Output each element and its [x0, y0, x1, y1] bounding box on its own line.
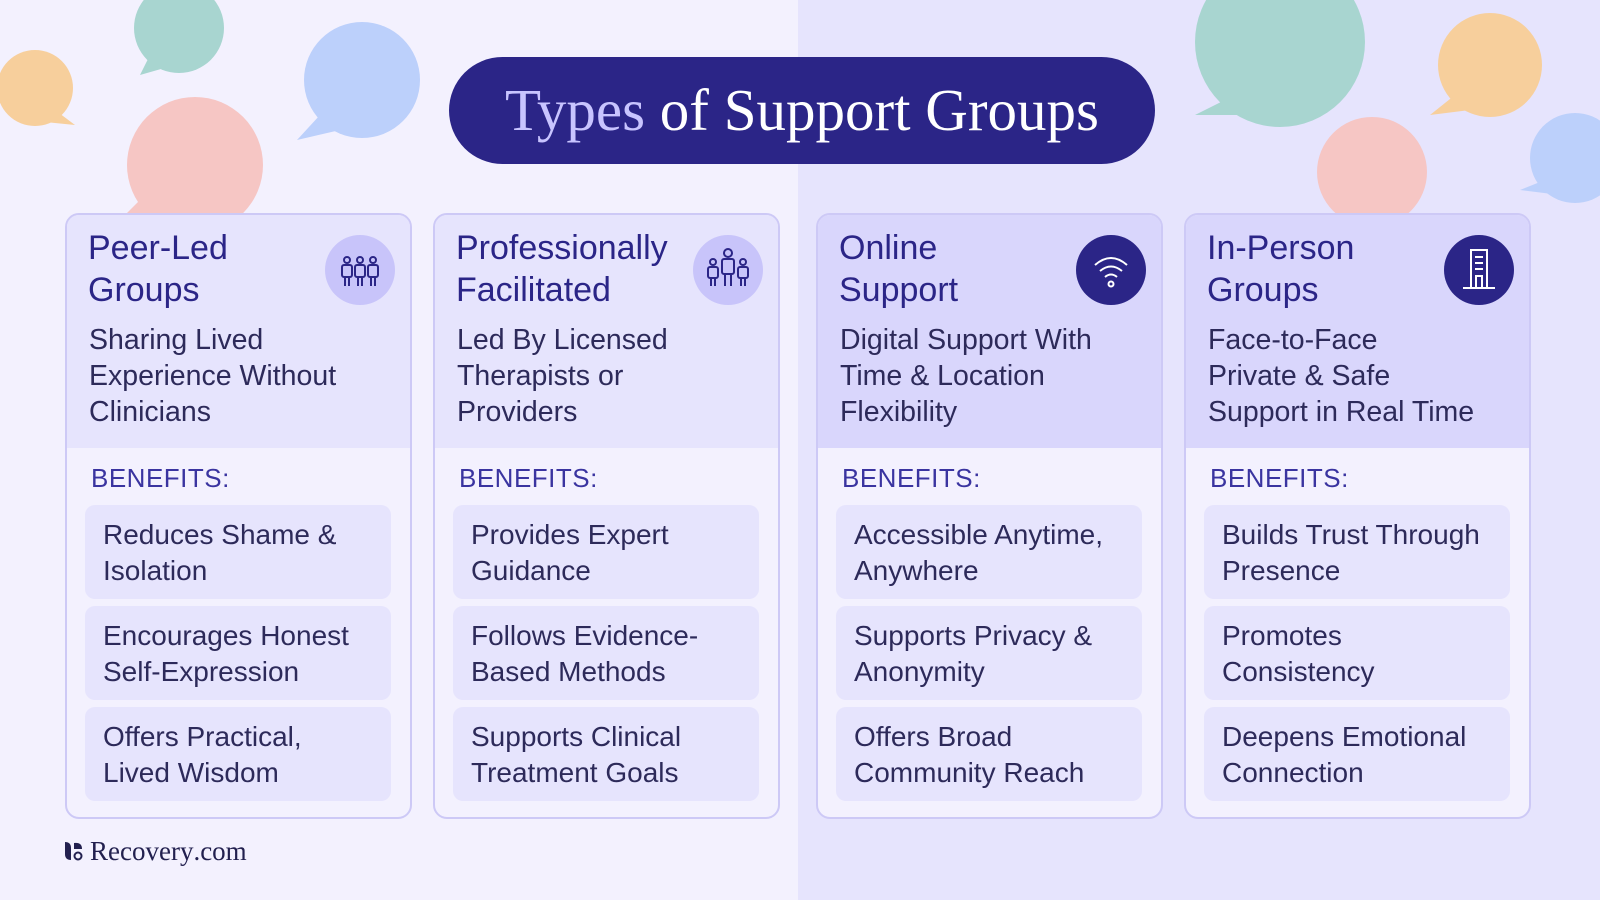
- benefit: Presence: [1222, 555, 1340, 586]
- panel: peer-led: BENEFITS:: [91, 463, 230, 493]
- benefit: Anonymity: [854, 656, 985, 687]
- subtitle: Face-to-Face: [1208, 324, 1377, 356]
- benefit: Supports Clinical: [471, 721, 681, 752]
- benefit: [836, 707, 1142, 801]
- benefit: Follows Evidence-: [471, 620, 698, 651]
- icon: wifi: [1076, 235, 1146, 305]
- benefit: [85, 505, 391, 599]
- heading: Support: [839, 271, 958, 309]
- benefit: [1204, 505, 1510, 599]
- subtitle: Providers: [457, 396, 577, 428]
- benefit: Based Methods: [471, 656, 666, 687]
- panel: online support: BENEFITS:: [842, 463, 981, 493]
- title: Types of Support Groups: [505, 77, 1099, 143]
- benefit: Offers Practical,: [103, 721, 302, 752]
- heading: [839, 229, 958, 309]
- benefit: Promotes: [1222, 620, 1342, 651]
- subtitle: Led By Licensed: [457, 324, 668, 356]
- subtitle: Sharing Lived: [89, 324, 263, 356]
- benefit: Builds Trust Through: [1222, 519, 1480, 550]
- benefit: Isolation: [103, 555, 207, 586]
- heading: Professionally: [456, 229, 668, 267]
- benefit: Lived Wisdom: [103, 757, 279, 788]
- icon: people: [325, 235, 395, 305]
- heading: [1207, 229, 1354, 309]
- panel: in-person: BENEFITS:: [1210, 463, 1349, 493]
- benefit: Deepens Emotional: [1222, 721, 1466, 752]
- panel: online support: [816, 213, 1163, 819]
- subtitle: Experience Without: [89, 360, 336, 392]
- benefit: [836, 505, 1142, 599]
- panel: in-person: [1184, 213, 1531, 819]
- benefit: Encourages Honest: [103, 620, 349, 651]
- heading: [88, 229, 228, 309]
- benefit: [453, 505, 759, 599]
- icon: building: [1444, 235, 1514, 305]
- panel: professionally facilitated: [433, 213, 780, 819]
- subtitle: Digital Support With: [840, 324, 1092, 356]
- subtitle: Private & Safe: [1208, 360, 1390, 392]
- benefit: Community Reach: [854, 757, 1084, 788]
- subtitle: Flexibility: [840, 396, 957, 428]
- benefit: Anywhere: [854, 555, 979, 586]
- title: [449, 57, 1155, 164]
- heading: Groups: [88, 271, 200, 309]
- subtitle: [89, 324, 336, 428]
- benefit: Guidance: [471, 555, 591, 586]
- benefit: Treatment Goals: [471, 757, 678, 788]
- benefit: Connection: [1222, 757, 1364, 788]
- heading: Groups: [1207, 271, 1318, 309]
- benefit: [453, 707, 759, 801]
- subtitle: Time & Location: [840, 360, 1045, 392]
- icon: leader: [693, 235, 763, 305]
- logo: .com: [193, 836, 247, 866]
- benefit: [836, 606, 1142, 700]
- subtitle: Clinicians: [89, 396, 211, 428]
- subtitle: Therapists or: [457, 360, 623, 392]
- subtitle: [457, 324, 668, 428]
- subtitle: [840, 324, 1092, 428]
- heading: In-Person: [1207, 229, 1354, 267]
- benefit: [85, 707, 391, 801]
- logo: Recovery: [90, 836, 193, 866]
- benefit: [1204, 707, 1510, 801]
- benefit: Offers Broad: [854, 721, 1012, 752]
- benefit: Provides Expert: [471, 519, 669, 550]
- benefit: Accessible Anytime,: [854, 519, 1103, 550]
- subtitle: Support in Real Time: [1208, 396, 1474, 428]
- heading: [456, 229, 668, 309]
- benefit: Consistency: [1222, 656, 1375, 687]
- subtitle: [1208, 324, 1474, 428]
- heading: Online: [839, 229, 937, 267]
- benefit: [1204, 606, 1510, 700]
- benefit: Self-Expression: [103, 656, 299, 687]
- panel: peer-led: [65, 213, 412, 819]
- benefit: Supports Privacy &: [854, 620, 1092, 651]
- logo: [65, 836, 247, 866]
- benefit: [85, 606, 391, 700]
- benefit: Reduces Shame &: [103, 519, 336, 550]
- heading: Peer-Led: [88, 229, 228, 267]
- panel: professionally facilitated: BENEFITS:: [459, 463, 598, 493]
- benefit: [453, 606, 759, 700]
- heading: Facilitated: [456, 271, 611, 309]
